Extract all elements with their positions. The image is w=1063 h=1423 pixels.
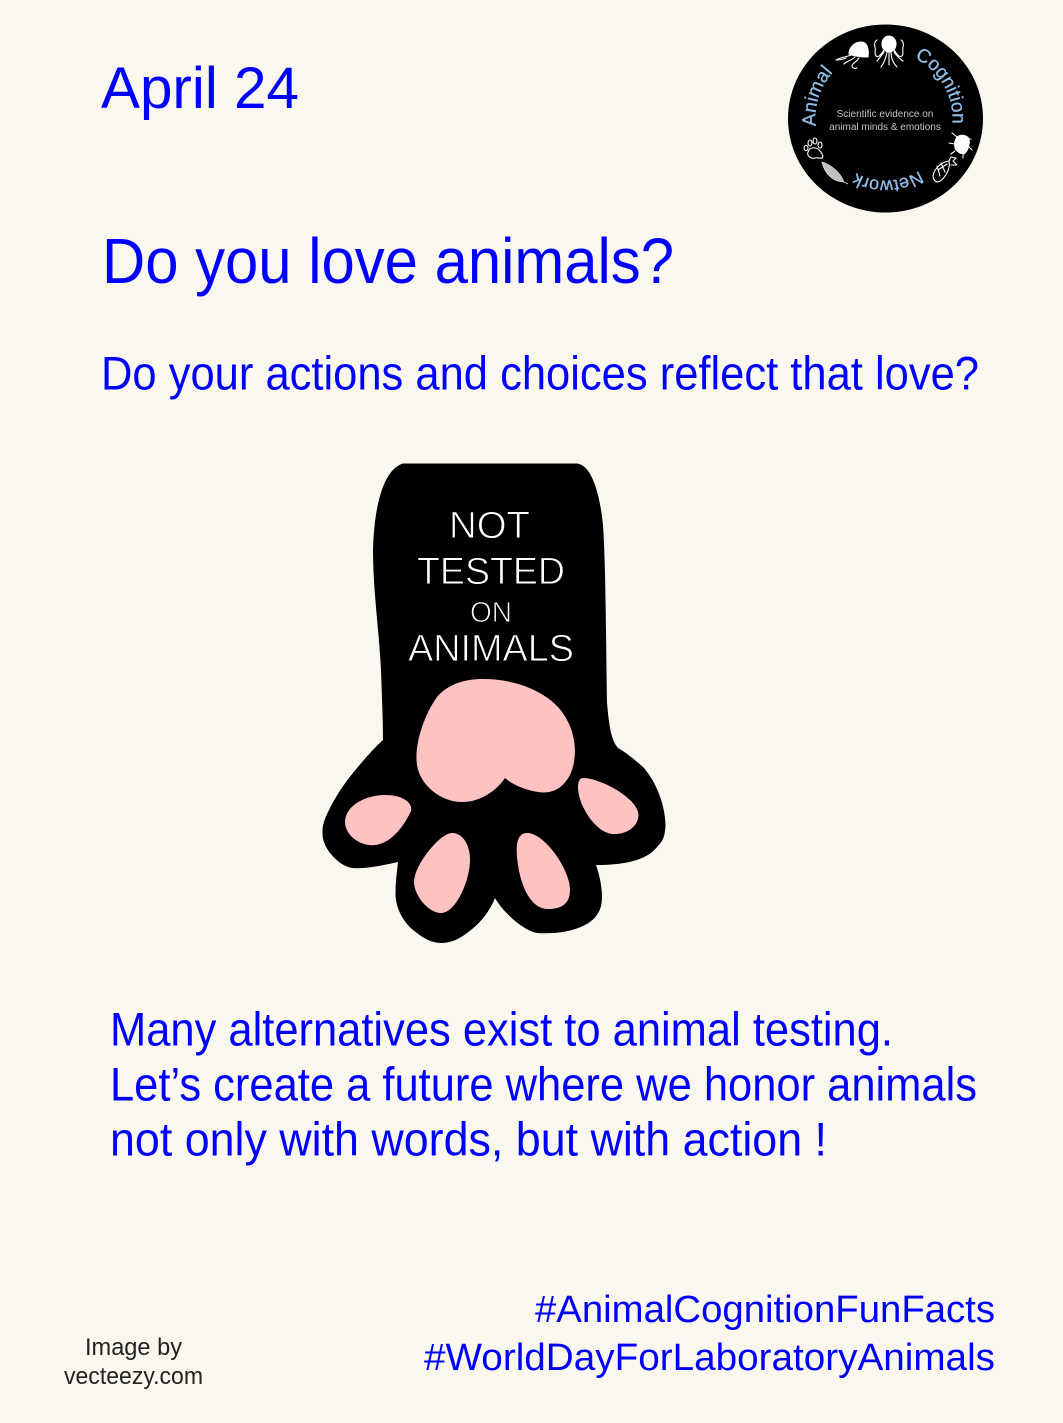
logo ring text: Network — [852, 171, 924, 192]
closing message: not only with words, but with action ! — [110, 1112, 827, 1166]
icon: octopus — [875, 36, 903, 67]
paw label: ON — [470, 597, 512, 629]
icon: jellyfish — [836, 42, 868, 68]
logo: Animal Cognition Network badge — [788, 24, 983, 212]
main question heading: Do you love animals? — [102, 225, 674, 297]
hashtags: #AnimalCognitionFunFacts — [535, 1289, 995, 1331]
logo tagline: Scientific evidence on — [837, 109, 933, 120]
icon: paw print — [804, 138, 823, 158]
paw label: TESTED — [417, 551, 565, 593]
paw label: NOT — [449, 505, 530, 547]
hashtags — [424, 1289, 995, 1379]
paw silhouette — [322, 464, 666, 943]
closing message — [110, 1002, 977, 1166]
paw label: ANIMALS — [408, 628, 574, 670]
closing message: Let’s create a future where we honor animals — [110, 1058, 977, 1110]
image credit — [64, 1334, 203, 1390]
date heading: April 24 — [101, 56, 299, 121]
toe pad 2 — [414, 833, 470, 913]
logo tagline: animal minds & emotions — [829, 122, 941, 133]
image credit: Image by — [85, 1334, 182, 1361]
illustration: cat paw with label — [322, 464, 666, 943]
hashtags: #WorldDayForLaboratoryAnimals — [424, 1337, 995, 1379]
toe pad 3 — [517, 833, 570, 909]
paw label — [408, 505, 574, 670]
logo ring text: Cognition — [918, 49, 964, 123]
sub question: Do your actions and choices reflect that love? — [101, 346, 979, 400]
toe pad 1 — [345, 795, 411, 845]
closing message: Many alternatives exist to animal testing. — [110, 1002, 893, 1056]
logo ring text — [802, 49, 964, 192]
logo ring text: Animal — [802, 64, 832, 126]
image credit: vecteezy.com — [64, 1363, 203, 1390]
main pad — [416, 679, 575, 802]
icon: beetle — [949, 133, 972, 158]
icon: feather — [822, 162, 848, 184]
icon: fish — [933, 157, 957, 182]
toe pad 4 — [578, 778, 638, 834]
